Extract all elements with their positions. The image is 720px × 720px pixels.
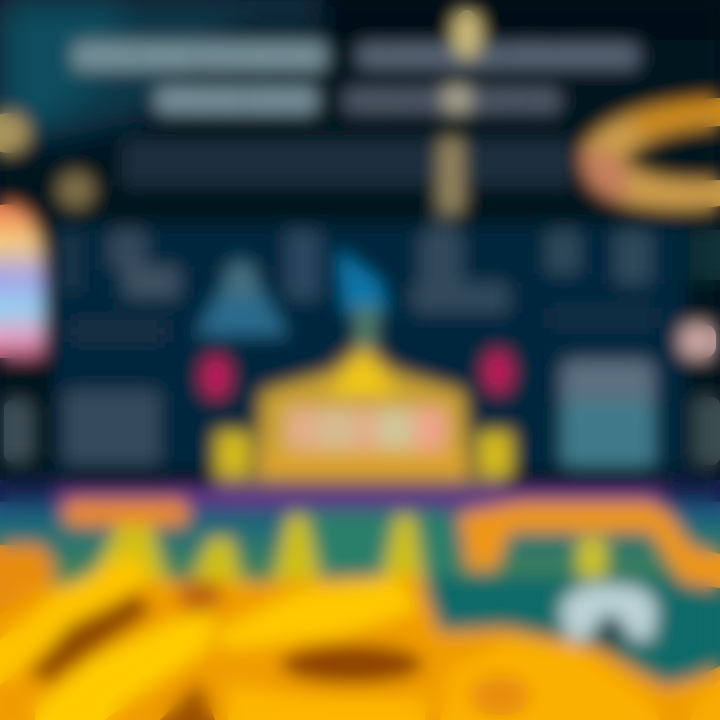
title: ONLINE CASINO [76,41,324,71]
orange ribbons [64,500,720,588]
yellow band three [215,578,418,650]
subtitle text block [122,140,572,186]
title: GAMES GUIDE [360,41,636,71]
background [0,0,720,560]
title: WINS AND [158,85,315,115]
dark brown band [28,592,152,684]
icon: rainbow slot at left [0,204,43,358]
icon: white game controller [560,585,657,649]
golden foreground [0,545,720,720]
yellow band two [35,610,215,720]
icon: golden ring [582,98,720,209]
yellow band one [0,552,148,685]
right gold hump [440,640,660,720]
lower centre gold [228,685,425,720]
icon: small gold coins [0,113,94,208]
panel: upper centre [413,232,508,313]
casino building [216,344,512,480]
icon: golden vertical ornament [432,10,481,262]
bottom dark shadow [160,680,215,720]
brown spot [178,579,222,613]
title [73,41,638,115]
roof and body [256,344,470,480]
side towers [216,432,250,476]
orange patch [470,675,530,715]
icon: magenta lights [202,351,512,398]
dark brown ellipse [280,644,424,684]
green floor [0,492,720,690]
left orange blob [0,545,58,615]
panel: lower right [562,360,720,466]
icon: pink badge right [680,324,716,358]
panel: upper right [547,230,720,328]
yellow spikes [90,515,428,600]
icon: blue flame with green stem [338,250,386,348]
title: JACKPOTS [346,85,558,115]
purple stage band [0,478,720,508]
panel: upper left [60,230,179,342]
panel: lower left [4,390,160,464]
marquee sign [286,408,446,450]
panel: upper blue triangle [196,230,320,335]
far right bump [690,680,720,720]
base of gold [0,570,720,720]
